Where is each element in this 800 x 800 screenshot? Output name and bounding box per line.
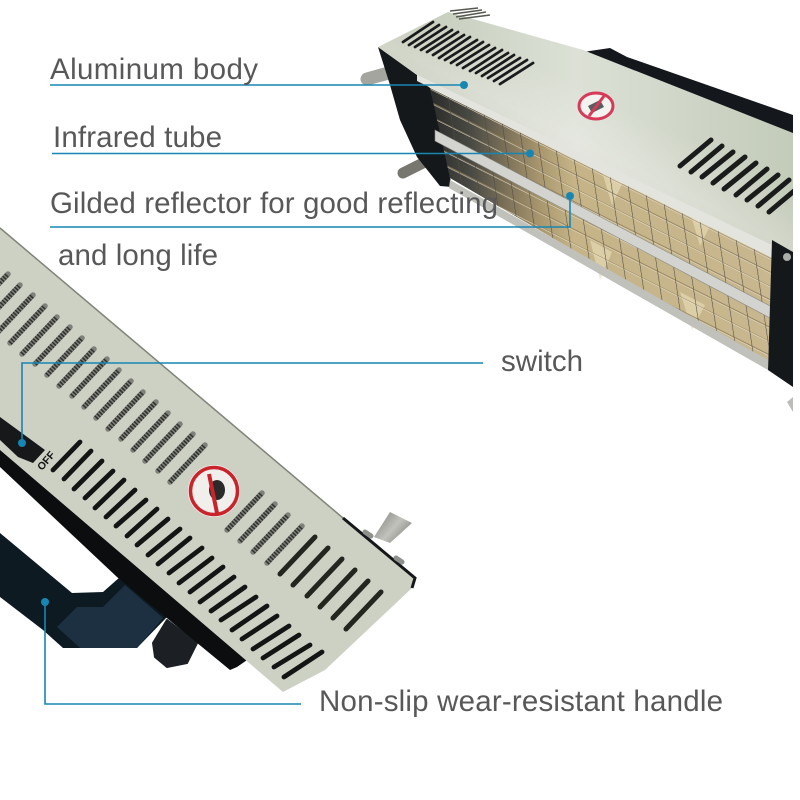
product photo: upper heater, front view [367,8,800,412]
left black end plate [378,47,452,187]
label: Non-slip wear-resistant handle [319,685,723,718]
warning sticker, upper [579,93,613,119]
wire mesh [430,88,772,364]
slot shading, upper row [0,274,302,563]
cable gland [153,620,197,667]
stand foot [787,397,793,412]
callout: infrared tube [52,121,534,158]
switch [0,417,45,463]
leader line [52,152,530,154]
label: Infrared tube [53,121,222,154]
panel shadow edge [0,228,343,518]
leader line [45,602,301,704]
panel [0,228,415,692]
product photo: lower heater, rear view [0,228,415,692]
label line one: Gilded reflector for good reflecting [50,187,498,220]
leader line [50,196,570,227]
vent slots, right group [680,140,800,212]
label: Aluminum body [50,53,258,86]
callout: handle [41,598,723,718]
centre silver rail [435,130,772,319]
anchor dot [566,192,574,200]
side bracket edge [343,518,415,588]
gold reflector [430,88,772,364]
anchor dot [18,439,26,447]
anchor dot [526,150,534,158]
bottom silver rail [449,180,768,370]
handle block face [57,585,163,648]
callout: aluminum body [50,53,468,89]
warning sticker, lower [188,465,240,517]
handle [0,533,167,648]
silver lip under panel [417,75,772,258]
callout: gilded reflector [50,187,574,272]
black mounting rail [0,448,250,670]
panel highlight [451,14,738,216]
anchor dot [41,598,49,606]
rear handle [583,48,793,140]
anchor dot [460,81,468,89]
callout: switch [18,345,583,447]
label: switch [501,345,583,378]
right black end plate [768,240,793,387]
right plate screw [783,253,791,261]
bracket screws [365,532,402,562]
vent slots, upper row [0,274,302,563]
reflector and mesh window [430,88,772,370]
reflection highlights [590,165,712,330]
vent slots, upper row dark end [280,537,381,629]
off label: OFF [35,449,58,473]
left mounting knob [367,72,392,79]
leader line [22,363,483,443]
aluminum top panel [378,12,793,252]
label line two: and long life [58,239,218,272]
vent slots, far top group [450,8,490,19]
vent slots, lower row [53,442,322,677]
mounting knob [374,512,412,543]
leader line [50,84,464,86]
lower left mounting knob [403,163,423,173]
vent slots, left group [403,22,533,84]
